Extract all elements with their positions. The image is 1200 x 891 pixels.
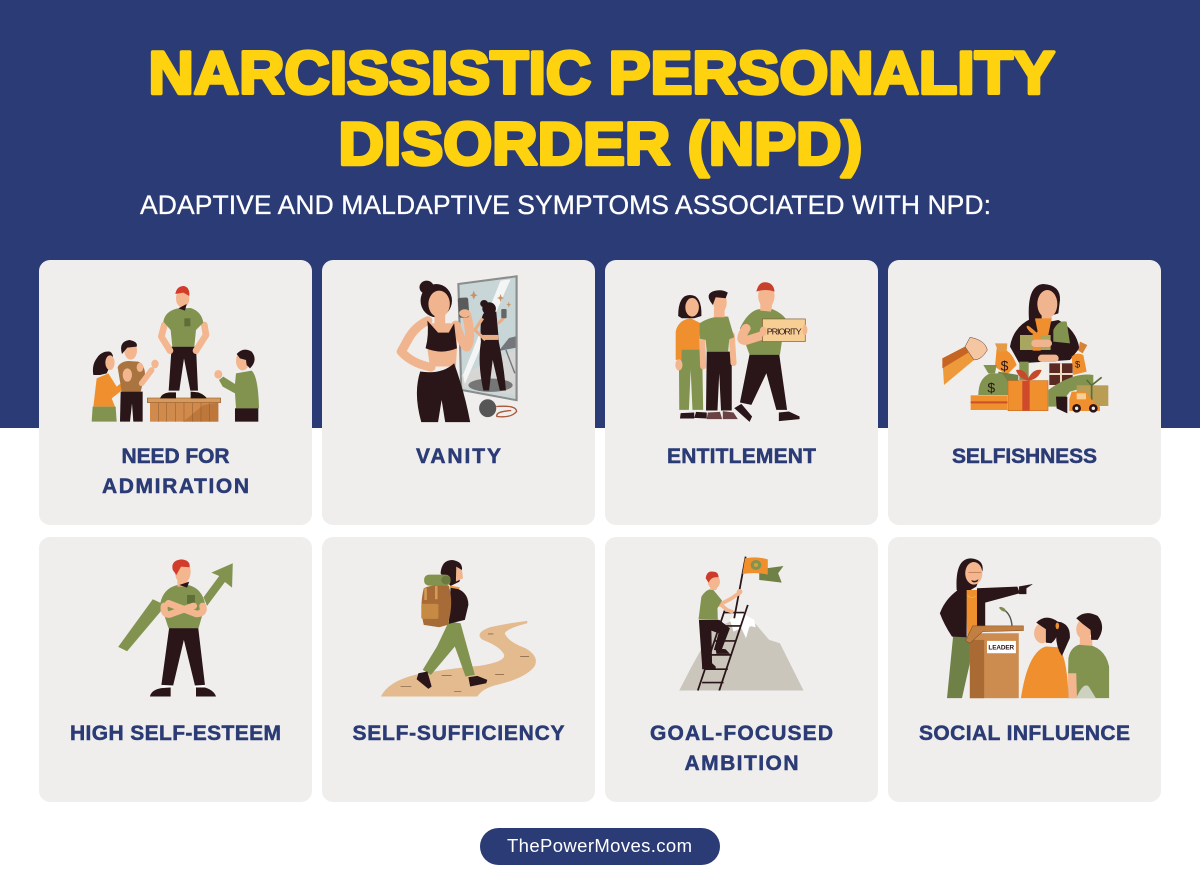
icon: woman taking mirror selfie: [401, 276, 517, 422]
panel: goal-focused ambition: [605, 537, 878, 802]
label: SELFISHNESS: [952, 445, 1097, 468]
title: DISORDER (NPD): [338, 111, 862, 178]
footer website pill: ThePowerMoves.com: [507, 835, 692, 856]
icon: people applauding man on box: [92, 286, 259, 422]
icon: climber with flag on mountain: [679, 557, 803, 691]
footer website pill: [480, 828, 720, 865]
icon: hiker on winding path: [381, 560, 536, 697]
icon: woman hoarding gifts and money: $: [1075, 359, 1081, 369]
label: SELF-SUFFICIENCY: [352, 722, 564, 745]
label: GOAL-FOCUSED: [650, 722, 833, 745]
title: NARCISSISTIC PERSONALITY: [148, 40, 1055, 107]
icon: man with priority sign: PRIORITY: [767, 327, 802, 337]
icon: leader at podium with audience: LEADER: [988, 645, 1015, 651]
panel: selfishness: [888, 260, 1161, 525]
label: VANITY: [416, 445, 501, 468]
label: ENTITLEMENT: [667, 445, 816, 468]
label: SOCIAL INFLUENCE: [919, 722, 1130, 745]
icon: woman hoarding gifts and money: [942, 284, 1108, 413]
subtitle: ADAPTIVE AND MALDAPTIVE SYMPTOMS ASSOCIATED WITH NPD:: [140, 190, 991, 220]
panel: self-sufficiency: [322, 537, 595, 802]
navy header background: [0, 0, 1200, 428]
label: HIGH SELF-ESTEEM: [70, 722, 281, 745]
label: NEED FOR: [122, 445, 230, 468]
panel: vanity: [322, 260, 595, 525]
panel: entitlement: [605, 260, 878, 525]
panel: social influence: [888, 537, 1161, 802]
icon: confident man with rising arrow: [118, 559, 233, 697]
label: ADMIRATION: [102, 475, 249, 498]
title: [148, 40, 1055, 178]
icon: woman hoarding gifts and money: $: [987, 379, 995, 395]
icon: woman hoarding gifts and money: $: [1001, 358, 1009, 374]
panel: high self-esteem: [39, 537, 312, 802]
icon: leader at podium with audience: [940, 558, 1109, 698]
panel: need for admiration: [39, 260, 312, 525]
label: AMBITION: [684, 752, 798, 775]
icon: man with priority sign: [675, 282, 807, 422]
